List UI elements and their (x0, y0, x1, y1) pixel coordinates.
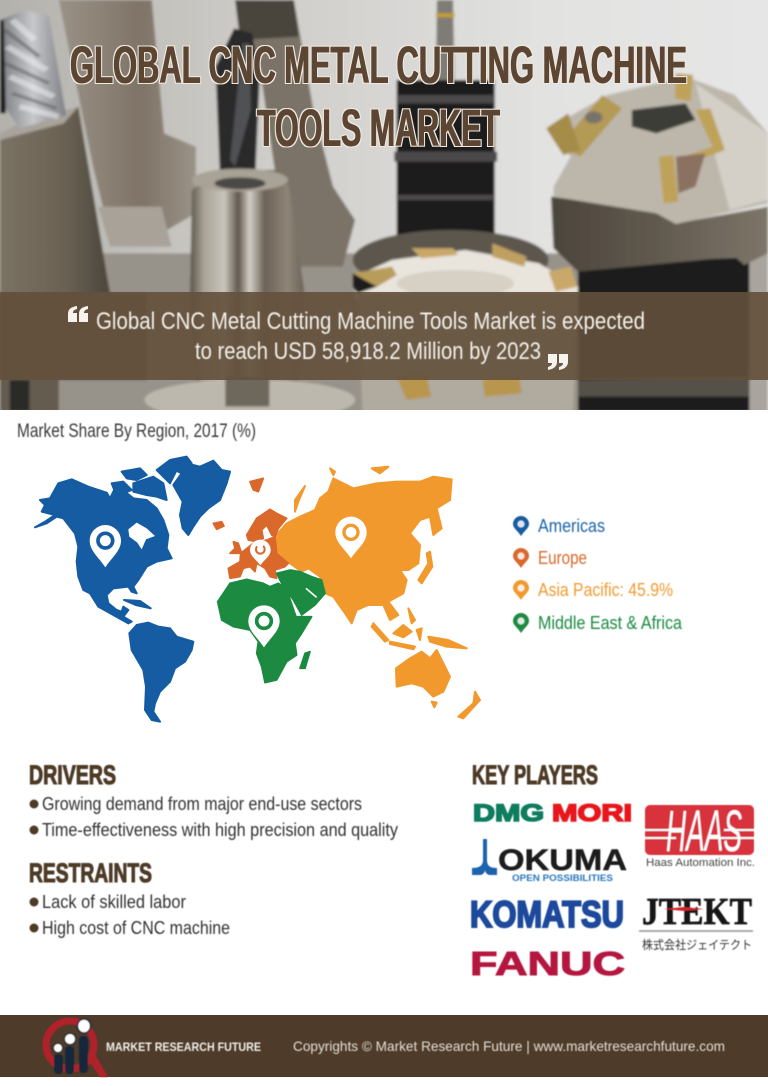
panel: key players (470, 760, 755, 982)
logo: DMG MORI: DMG (473, 800, 544, 827)
title: TOOLS MARKET (257, 99, 500, 158)
pin: Middle East and Africa (248, 605, 280, 647)
legend item: Middle East and Africa: Middle East & Africa (538, 613, 683, 633)
thin tool and spindle (436, 0, 455, 80)
right face mill (578, 257, 749, 412)
band text: to reach USD 58,918.2 Million by 2023 (195, 338, 541, 365)
footer (0, 1015, 768, 1077)
front left cone (0, 107, 110, 293)
region: Europe (213, 478, 288, 578)
centre back holder (251, 6, 356, 268)
logo: Komatsu: KOMATSU (470, 894, 624, 935)
far left holder (59, 0, 196, 247)
logo: Okuma: OPEN POSSIBILITIES (512, 873, 613, 884)
logo: Okuma (472, 839, 627, 884)
caption band (0, 292, 768, 380)
logo: JTEKT: 株式会社ジェイテクト (642, 937, 752, 952)
legend item: Europe (513, 548, 587, 568)
heading: key players: KEY PLAYERS (472, 760, 598, 790)
restraint item 2: High cost of CNC machine (42, 918, 230, 938)
panel: restraints (29, 858, 230, 938)
lower cutter below band (358, 293, 578, 412)
copyright: Copyrights © Market Research Future | www.marketresearchfuture.com (293, 1038, 725, 1054)
white cutter disc (354, 248, 580, 292)
pin: Europe (250, 540, 271, 565)
logo: Okuma: OKUMA (498, 844, 627, 877)
logo: Haas (645, 799, 755, 869)
title (70, 36, 687, 158)
panel: drivers (29, 760, 398, 840)
logo: DMG MORI: MORI (552, 800, 632, 827)
legend item: Americas: Americas (538, 516, 605, 536)
band text: Global CNC Metal Cutting Machine Tools Market is expected (96, 308, 645, 335)
legend item: Europe: Europe (538, 548, 587, 568)
icon: closing quote (548, 354, 568, 370)
region: Americas (35, 457, 230, 722)
photo: CNC cutting tools (0, 0, 768, 421)
driver item 1: Growing demand from major end-use sectors (42, 794, 362, 814)
region: Asia Pacific (275, 467, 480, 718)
centre silver cone (190, 170, 305, 293)
black drill (216, 28, 260, 188)
legend item: Asia Pacific: Asia Pacific: 45.9% (538, 580, 673, 600)
legend (513, 516, 683, 633)
base under cutter (352, 228, 550, 273)
lower left flange (0, 293, 147, 412)
world map (35, 457, 480, 722)
company name: MARKET RESEARCH FUTURE (106, 1040, 261, 1054)
legend item: Americas (513, 516, 605, 536)
pin: Americas (90, 525, 121, 567)
end mill (0, 10, 66, 128)
band text (96, 308, 645, 365)
map heading: Market Share By Region, 2017 (%) (17, 421, 256, 442)
region: Middle East and Africa (218, 570, 325, 683)
logo: Market Research Future (46, 1019, 108, 1077)
icon: opening quote (68, 306, 88, 322)
logo: JTEKT (639, 891, 753, 952)
logo: Fanuc: FANUC (470, 945, 625, 982)
heading: restraints: RESTRAINTS (29, 858, 152, 888)
pin: Asia Pacific (335, 517, 367, 558)
logo: JTEKT: JTEKT (642, 891, 752, 933)
restraint item 1: Lack of skilled labor (42, 892, 186, 912)
logo: DMG MORI (473, 800, 632, 827)
logo: Haas: Haas Automation Inc. (646, 857, 755, 869)
heading: drivers: DRIVERS (29, 760, 116, 790)
driver item 2: Time-effectiveness with high precision and quality (42, 820, 398, 840)
